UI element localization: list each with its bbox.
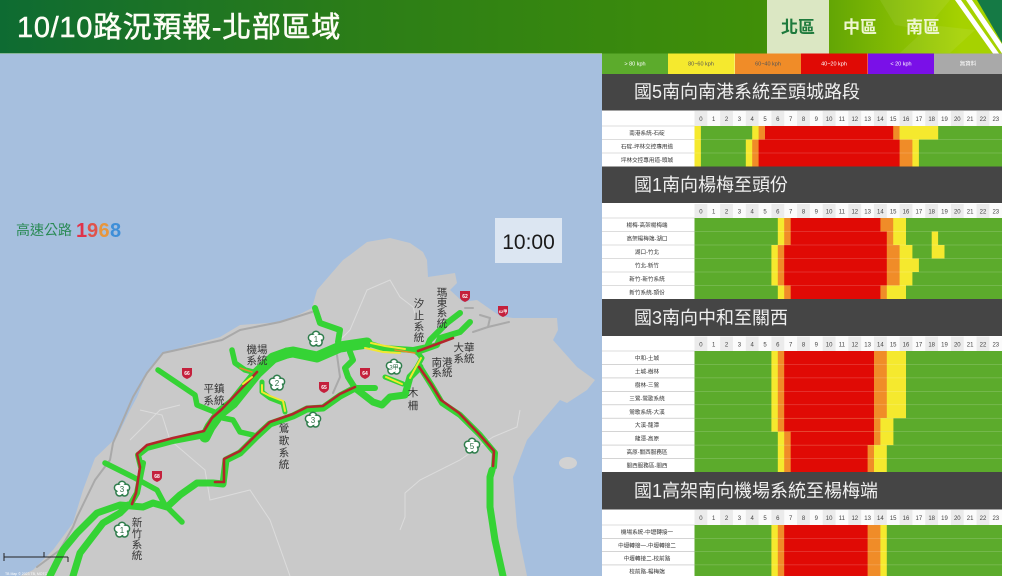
- hour axis: [602, 110, 1002, 126]
- hour axis: 8: [802, 117, 806, 123]
- hour axis: 22: [980, 210, 987, 216]
- slow segments: yellow and orange: [243, 343, 421, 411]
- heading: 國1南向楊梅至頭份: [634, 175, 788, 195]
- hour axis: 14: [877, 210, 884, 216]
- hour axis: [602, 203, 1002, 218]
- hour axis: 11: [839, 516, 846, 522]
- hour axis: 8: [802, 342, 806, 348]
- speed legend: 無資料: [960, 60, 977, 68]
- speed heatmap rows: 大溪-龍潭: [635, 421, 660, 429]
- speed heatmap rows: 坪林交控專用道-頭城: [621, 156, 674, 164]
- map labels: interchanges: 木: [408, 387, 419, 399]
- hour axis: 9: [815, 342, 819, 348]
- freeway shields: 5: [470, 442, 475, 451]
- freeway shields: 3甲: [389, 364, 399, 372]
- speed heatmap rows: 高架楊梅端-湖口: [626, 234, 668, 242]
- provincial expressway shields: [152, 291, 508, 482]
- hour axis: [602, 510, 1002, 525]
- freeway shields: 2: [275, 379, 280, 388]
- hour axis: 5: [763, 210, 767, 216]
- hour axis: 8: [802, 210, 806, 216]
- hour axis: 15: [890, 210, 897, 216]
- speed heatmap rows: 樹林-三鶯: [635, 381, 660, 389]
- hour axis: 21: [967, 117, 974, 123]
- hour axis: 22: [980, 117, 987, 123]
- time box: [495, 218, 562, 263]
- heading: [602, 299, 1002, 336]
- hour axis: 6: [776, 342, 780, 348]
- hour axis: 15: [890, 117, 897, 123]
- hour axis: 21: [967, 516, 974, 522]
- hour axis: 9: [815, 516, 819, 522]
- speed heatmap rows: 機場系統-中壢轉接一: [621, 528, 674, 536]
- heading: 國3南向中和至關西: [634, 308, 788, 328]
- hour axis: 10: [826, 516, 833, 522]
- hour axis: 5: [763, 117, 767, 123]
- speed heatmap rows: 南港系統-石碇: [629, 129, 665, 137]
- hour axis: 23: [992, 117, 1000, 123]
- hour axis: [602, 336, 1002, 351]
- logo: freeway 1968: 8: [110, 220, 121, 242]
- hour axis: 13: [864, 342, 872, 348]
- map labels: interchanges: 東: [437, 296, 448, 309]
- hour axis: 15: [890, 342, 897, 348]
- freeway network: free-flow green: [50, 308, 503, 576]
- speed heatmap rows: [602, 218, 1002, 299]
- tab: north region: [767, 0, 829, 54]
- hour axis: 10: [826, 117, 833, 123]
- speed heatmap rows: 土城-樹林: [635, 367, 660, 375]
- county boundaries: [130, 280, 520, 576]
- hour axis: 10: [826, 210, 833, 216]
- speed heatmap rows: 龍潭-高原: [635, 435, 660, 443]
- hour axis: 15: [890, 516, 897, 522]
- freeway shields: 3: [311, 416, 316, 425]
- map labels: interchanges: 統: [279, 458, 290, 471]
- speed legend: 80~60 kph: [688, 62, 714, 68]
- hour axis: 16: [903, 117, 910, 123]
- hour axis: 7: [789, 210, 793, 216]
- hour axis: 11: [839, 342, 846, 348]
- map labels: interchanges: 歌: [279, 434, 290, 447]
- hour axis: 3: [738, 117, 742, 123]
- banner corner stripes: [955, 0, 1002, 54]
- provincial expressway shields: 65: [321, 385, 327, 391]
- hour axis: 17: [916, 342, 923, 348]
- hour axis: 12: [851, 117, 859, 123]
- time box: 10:00: [502, 231, 555, 254]
- logo: freeway 1968: 1: [76, 220, 87, 242]
- heading: [602, 74, 1002, 110]
- hour axis: 10: [826, 342, 833, 348]
- tab: central region: 中區: [843, 18, 877, 37]
- hour axis: 20: [954, 210, 961, 216]
- hour axis: 0: [699, 516, 703, 522]
- map scale bar: [4, 552, 68, 576]
- speed heatmap rows: 新竹系統-頭份: [629, 288, 665, 296]
- logo: freeway 1968: [16, 222, 120, 237]
- hour axis: 8: [802, 516, 806, 522]
- speed heatmap rows: 中和-土城: [635, 354, 660, 362]
- hour axis: 17: [916, 117, 923, 123]
- map labels: interchanges: 系統: [454, 352, 475, 365]
- speed legend: 40~20 kph: [821, 62, 847, 68]
- hour axis: 13: [864, 210, 872, 216]
- hour axis: 2: [725, 210, 729, 216]
- hour axis: 12: [851, 210, 859, 216]
- hour axis: 17: [916, 516, 923, 522]
- map labels: interchanges: 系: [414, 320, 424, 333]
- map labels: interchanges: 瑪: [437, 287, 447, 299]
- speed heatmap rows: 鶯歌系統-大溪: [629, 408, 665, 416]
- hour axis: 13: [864, 516, 872, 522]
- hour axis: 17: [916, 210, 923, 216]
- hour axis: 2: [725, 342, 729, 348]
- panel: freeway 3 Zhonghe to Guanxi: [602, 299, 1002, 472]
- map labels: interchanges: 竹: [132, 527, 143, 540]
- map panel: [0, 54, 602, 576]
- map labels: interchanges: 止: [414, 310, 424, 322]
- map labels: interchanges: 統: [414, 331, 425, 344]
- map labels: interchanges: 柵: [408, 399, 419, 412]
- hour axis: 4: [751, 516, 755, 522]
- hour axis: 5: [763, 342, 767, 348]
- map scale bar: TB Map © 2023 TB, MOTC: [5, 572, 48, 576]
- hour axis: 3: [738, 342, 742, 348]
- hour axis: 3: [738, 516, 742, 522]
- hour axis: 6: [776, 516, 780, 522]
- hour axis: 1: [712, 117, 716, 123]
- speed heatmap rows: 關西服務區-關西: [626, 462, 668, 470]
- logo: freeway 1968: 高速公路: [16, 222, 72, 238]
- speed heatmap rows: 竹北-新竹: [635, 262, 660, 270]
- freeway shields: 3: [120, 485, 125, 494]
- hour axis: 7: [789, 516, 793, 522]
- panel: freeway 1 Yangmei to Toufen: [602, 166, 1002, 299]
- panel: freeway 1 elevated: [602, 472, 1002, 576]
- hour axis: 0: [699, 210, 703, 216]
- map labels: interchanges: 系: [132, 538, 142, 551]
- heading: [602, 166, 1002, 203]
- hour axis: 0: [699, 117, 703, 123]
- speed heatmap rows: 湖口-竹北: [635, 248, 660, 256]
- hour axis: 19: [941, 342, 948, 348]
- speed heatmap rows: 石碇-坪林交控專用道: [621, 142, 674, 150]
- map labels: interchanges: 統: [437, 317, 448, 330]
- hour axis: 19: [941, 516, 948, 522]
- speed heatmap rows: 新竹-新竹系統: [629, 275, 665, 283]
- map labels: interchanges: 系: [437, 306, 447, 319]
- hour axis: 14: [877, 516, 884, 522]
- speed legend: 60~40 kph: [755, 62, 781, 68]
- hour axis: 22: [980, 516, 987, 522]
- map labels: interchanges: 統: [132, 549, 143, 562]
- header banner: [0, 0, 1002, 54]
- map labels: interchanges: 平鎮: [204, 382, 225, 395]
- hour axis: 23: [992, 210, 1000, 216]
- hour axis: 1: [712, 342, 716, 348]
- tab: south region: 南區: [906, 18, 940, 37]
- map labels: interchanges: 系統: [204, 394, 225, 407]
- map labels: interchanges: 系: [279, 446, 289, 459]
- heading: [602, 472, 1002, 510]
- hour axis: 20: [954, 342, 961, 348]
- hour axis: 21: [967, 210, 974, 216]
- speed heatmap rows: 楊梅-高架楊梅端: [626, 221, 668, 229]
- hour axis: 11: [839, 210, 846, 216]
- map labels: interchanges: 機場: [246, 343, 268, 356]
- speed heatmap rows: [602, 525, 1002, 576]
- speed heatmap rows: [602, 351, 1002, 472]
- map labels: interchanges: 系統: [246, 354, 268, 367]
- grey coastal and provincial roads: [37, 308, 509, 567]
- hour axis: 12: [851, 342, 859, 348]
- hour axis: 20: [954, 117, 961, 123]
- hour axis: 14: [877, 117, 884, 123]
- speed heatmap rows: 校前路-楊梅端: [629, 568, 665, 576]
- hour axis: 19: [941, 117, 948, 123]
- land: northern Taiwan: [20, 238, 595, 576]
- hour axis: 7: [789, 117, 793, 123]
- hour axis: 18: [928, 342, 936, 348]
- hour axis: 22: [980, 342, 987, 348]
- hour axis: 16: [903, 210, 910, 216]
- hour axis: 5: [763, 516, 767, 522]
- hour axis: 6: [776, 117, 780, 123]
- freeway shields: 1: [314, 335, 319, 344]
- map labels: interchanges: 南港: [432, 356, 453, 369]
- logo: freeway 1968: 9: [87, 220, 98, 242]
- sea background: [0, 54, 602, 576]
- hour axis: 18: [928, 516, 936, 522]
- hour axis: 4: [751, 342, 755, 348]
- freeway shields: 1: [120, 526, 125, 535]
- hour axis: 2: [725, 516, 729, 522]
- speed heatmap rows: 高原-關西服務區: [626, 448, 668, 456]
- heading: 國5南向南港系統至頭城路段: [634, 82, 860, 102]
- hour axis: 0: [699, 342, 703, 348]
- hour axis: 6: [776, 210, 780, 216]
- provincial expressway shields: 62: [462, 294, 468, 300]
- logo: freeway 1968: 6: [98, 220, 110, 242]
- hour axis: 16: [903, 342, 910, 348]
- hour axis: 9: [815, 117, 819, 123]
- hour axis: 13: [864, 117, 872, 123]
- speed heatmap rows: [602, 126, 1002, 166]
- hour axis: 4: [751, 117, 755, 123]
- hour axis: 12: [851, 516, 859, 522]
- map labels: interchanges: 鶯: [279, 422, 289, 435]
- hour axis: 3: [738, 210, 742, 216]
- provincial expressway shields: 66: [184, 371, 190, 377]
- hour axis: 4: [751, 210, 755, 216]
- speed legend: > 80 kph: [624, 62, 646, 68]
- hour axis: 1: [712, 516, 716, 522]
- map labels: interchanges: 系統: [432, 366, 453, 379]
- hour axis: 21: [967, 342, 974, 348]
- hour axis: 1: [712, 210, 716, 216]
- map labels: interchanges: 汐: [414, 297, 424, 310]
- hour axis: 19: [941, 210, 948, 216]
- speed heatmap rows: 三鶯-鶯歌系統: [629, 394, 665, 402]
- panel: freeway 5 southbound: [602, 74, 1002, 166]
- congested segments: red: [132, 338, 494, 504]
- hour axis: 11: [839, 117, 846, 123]
- hour axis: 7: [789, 342, 793, 348]
- speed legend: < 20 kph: [890, 62, 912, 68]
- provincial expressway shields: 64: [362, 371, 368, 377]
- hour axis: 16: [903, 516, 910, 522]
- hour axis: 20: [954, 516, 961, 522]
- freeway shields: [114, 331, 480, 537]
- provincial expressway shields: 68: [154, 474, 160, 480]
- speed legend: [602, 54, 1002, 74]
- map labels: interchanges: [132, 287, 475, 562]
- speed heatmap rows: 中壢轉接二-校前路: [624, 555, 671, 563]
- hour axis: 9: [815, 210, 819, 216]
- heading: 國1高架南向機場系統至楊梅端: [634, 481, 878, 501]
- map labels: interchanges: 新: [132, 516, 143, 529]
- hour axis: 18: [928, 117, 936, 123]
- map labels: interchanges: 大華: [454, 341, 474, 354]
- hour axis: 23: [992, 342, 1000, 348]
- tab: north region: 北區: [781, 18, 815, 37]
- title: 10/10路況預報-北部區域: [17, 11, 341, 44]
- hour axis: 18: [928, 210, 936, 216]
- provincial expressway shields: 62甲: [499, 309, 507, 314]
- hour axis: 14: [877, 342, 884, 348]
- speed heatmap rows: 中壢轉接一-中壢轉接二: [618, 541, 676, 549]
- hour axis: 23: [992, 516, 1000, 522]
- hour axis: 2: [725, 117, 729, 123]
- island: [559, 457, 577, 469]
